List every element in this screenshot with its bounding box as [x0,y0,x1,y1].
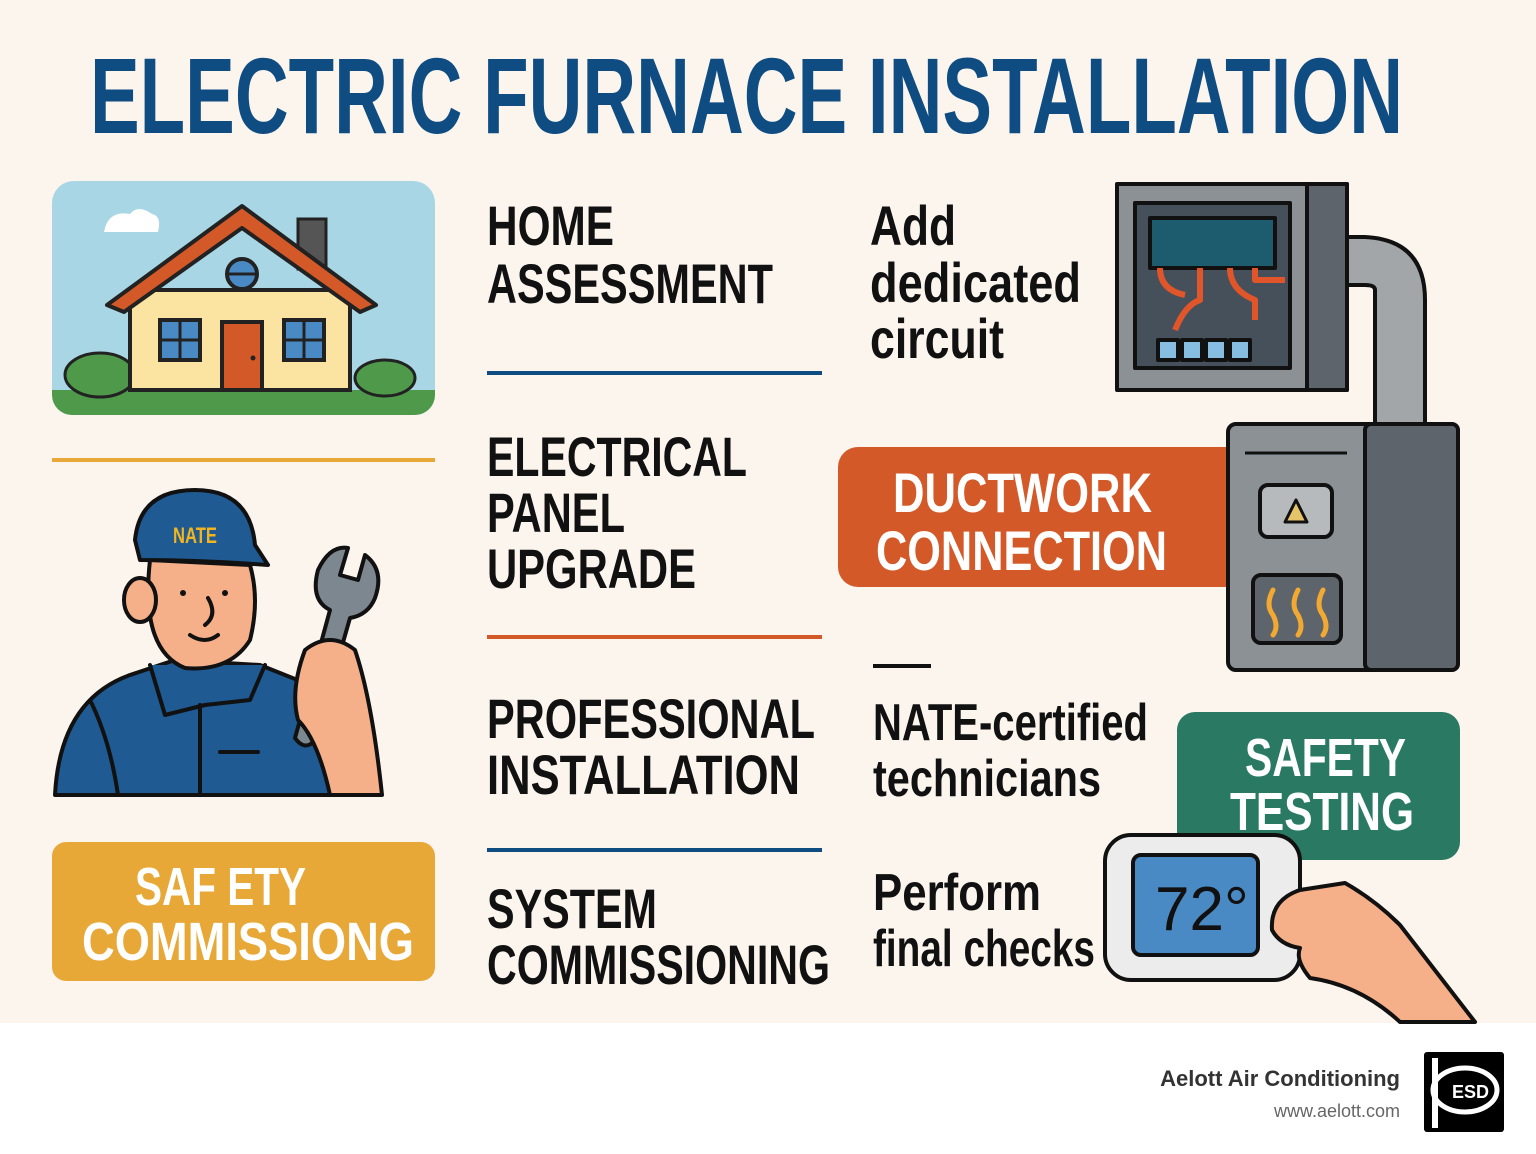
text: perform final checks [873,864,1095,978]
step: home assessment: HOME [487,194,614,257]
text: add dedicated circuit: circuit [870,307,1004,370]
logo [1424,1052,1504,1132]
step: electrical panel upgrade: ELECTRICAL [487,425,747,488]
text: NATE-certified technicians: NATE-certified [873,694,1148,752]
callout: ductwork connection [838,447,1258,587]
callout: safety commissioning: SAF ETY [135,857,306,917]
text: add dedicated circuit: dedicated [870,251,1081,314]
callout: ductwork connection: DUCTWORK [893,461,1152,524]
text: NATE-certified technicians: technicians [873,750,1101,808]
text: perform final checks: final checks [873,920,1095,978]
logo: ESD [1452,1082,1489,1102]
technician illustration [55,490,382,795]
step: system commissioning: COMMISSIONING [487,933,830,996]
text: NATE [173,523,217,548]
step: electrical panel upgrade: UPGRADE [487,537,696,600]
step: electrical panel upgrade [487,425,747,600]
step: professional installation: INSTALLATION [487,743,800,806]
text: add dedicated circuit: Add [870,194,956,257]
footer brand [1160,1066,1400,1121]
callout: safety testing: SAFETY [1245,728,1406,788]
callout: safety commissioning [52,842,435,981]
footer brand: Aelott Air Conditioning [1160,1066,1400,1091]
step: home assessment: ASSESSMENT [487,252,773,315]
step: system commissioning [487,877,830,996]
step: professional installation [487,687,815,806]
footer brand: www.aelott.com [1273,1101,1400,1121]
step: home assessment [487,194,773,315]
panel: house illustration [52,181,435,415]
step: electrical panel upgrade: PANEL [487,481,625,544]
illustration: thermostat and hand: 72° [1155,875,1249,944]
text: NATE-certified technicians [873,664,1148,808]
step: professional installation: PROFESSIONAL [487,687,815,750]
step: system commissioning: SYSTEM [487,877,657,940]
callout: safety commissioning: COMMISSIONG [82,912,414,972]
illustration: electrical panel, duct and furnace [1117,184,1458,670]
callout: safety testing: TESTING [1230,782,1414,842]
callout: ductwork connection: CONNECTION [876,519,1167,582]
text: add dedicated circuit [870,194,1081,370]
callout: safety testing [1177,712,1460,860]
illustration: thermostat and hand [1105,835,1475,1022]
text: perform final checks: Perform [873,864,1041,922]
